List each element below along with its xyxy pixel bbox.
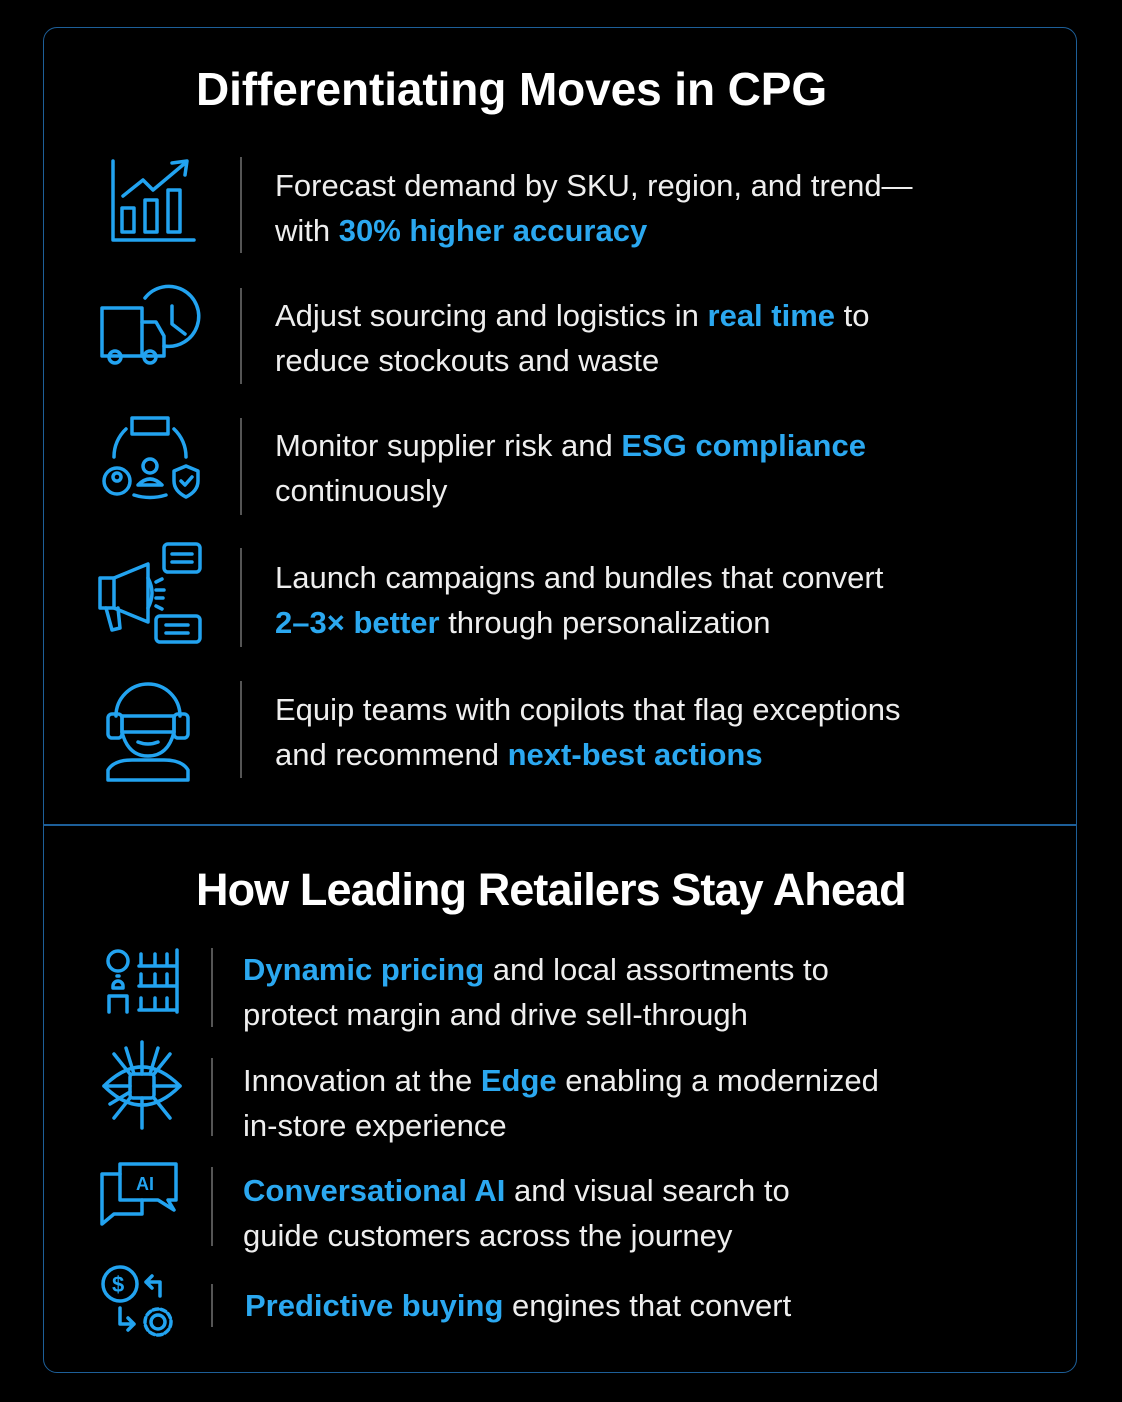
icon: headset agent bbox=[106, 682, 190, 782]
icon: megaphone bbox=[98, 542, 202, 644]
title: How Leading Retailers Stay Ahead: How Leading Retailers Stay Ahead bbox=[196, 864, 906, 915]
text: dynamic pricing: Dynamic pricing and local assortments to bbox=[243, 952, 829, 987]
text: monitor supplier: Monitor supplier risk and ESG compliance bbox=[275, 428, 866, 463]
title: Differentiating Moves in CPG: Differentiating Moves in CPG bbox=[196, 63, 827, 115]
text: forecast bbox=[275, 168, 913, 248]
text: dynamic pricing: protect margin and drive sell-through bbox=[243, 997, 748, 1032]
text: adjust sourcing bbox=[275, 298, 870, 378]
text: launch campaigns: 2–3× better through personalization bbox=[275, 605, 770, 640]
text: launch campaigns: Launch campaigns and bundles that convert bbox=[275, 560, 883, 595]
text: equip teams: and recommend next-best actions bbox=[275, 737, 763, 772]
text: conversational AI: Conversational AI and visual search to bbox=[243, 1173, 790, 1208]
icon: predictive buying: $ bbox=[112, 1272, 124, 1297]
text: innovation at edge: in-store experience bbox=[243, 1108, 507, 1143]
text: conversational AI bbox=[243, 1173, 790, 1253]
icon: AI chat: AI bbox=[136, 1174, 154, 1194]
text: equip teams bbox=[275, 692, 901, 772]
text: monitor supplier bbox=[275, 428, 866, 508]
text: adjust sourcing: reduce stockouts and waste bbox=[275, 343, 659, 378]
text: equip teams: Equip teams with copilots that flag exceptions bbox=[275, 692, 901, 727]
icon: predictive buying bbox=[101, 1265, 173, 1337]
icon: truck clock bbox=[100, 284, 200, 365]
text: dynamic pricing bbox=[243, 952, 829, 1032]
text: innovation at edge bbox=[243, 1063, 879, 1143]
text: innovation at edge: Innovation at the Edge enabling a modernized bbox=[243, 1063, 879, 1098]
icon: edge chip bbox=[102, 1040, 182, 1130]
text: conversational AI: guide customers across the journey bbox=[243, 1218, 732, 1253]
text: monitor supplier: continuously bbox=[275, 473, 447, 508]
text: forecast: with 30% higher accuracy bbox=[275, 213, 647, 248]
icon: chart bbox=[111, 159, 196, 242]
text: forecast: Forecast demand by SKU, region, and trend— bbox=[275, 168, 913, 203]
icon: AI chat bbox=[100, 1162, 178, 1226]
icon: supplier network bbox=[102, 416, 200, 500]
text: launch campaigns bbox=[275, 560, 884, 640]
icon: pricing shelves bbox=[106, 948, 179, 1014]
text: adjust sourcing: Adjust sourcing and logistics in real time to bbox=[275, 298, 870, 333]
text: predictive buying: Predictive buying engines that convert bbox=[245, 1288, 791, 1323]
